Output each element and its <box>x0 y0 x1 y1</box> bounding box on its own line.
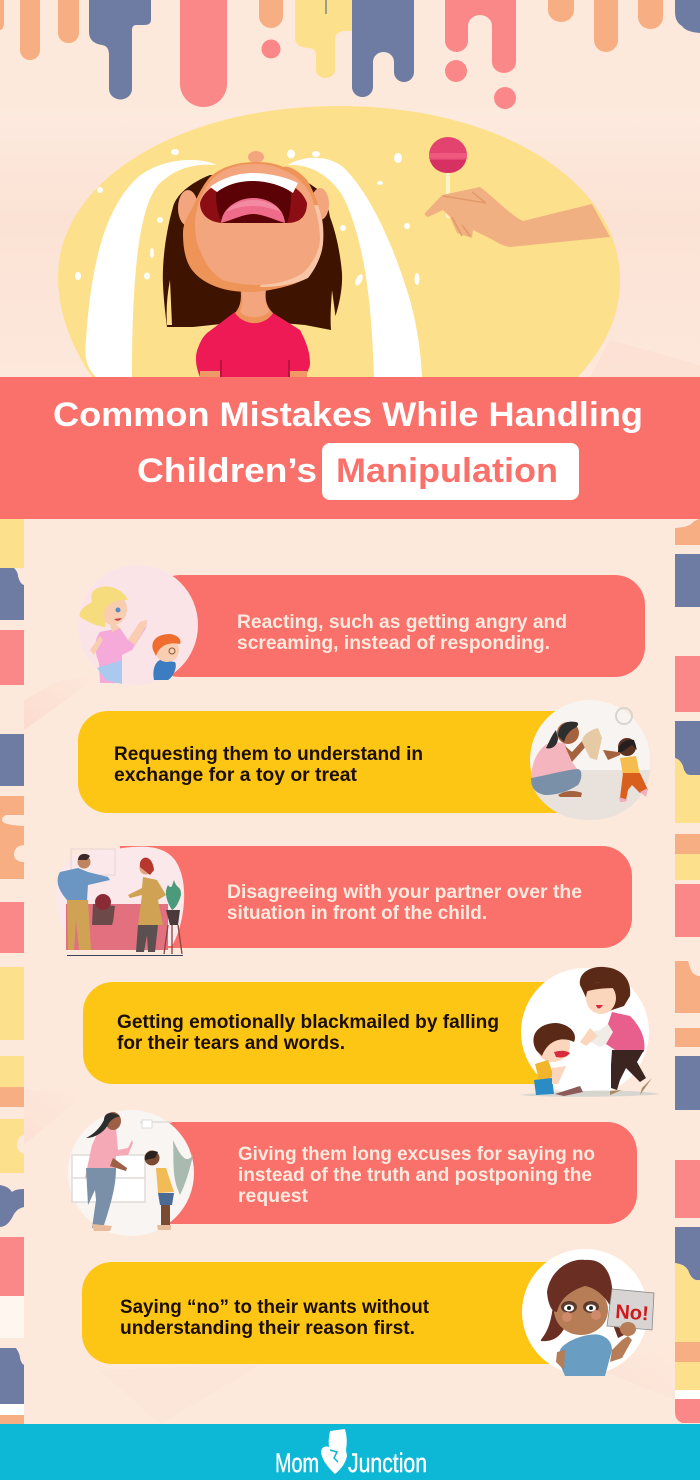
item 6: saying no <box>82 1249 654 1376</box>
bar <box>120 846 632 948</box>
text <box>227 882 582 924</box>
text: exchange for a toy or treat <box>114 765 358 786</box>
text: Giving them long excuses for saying no <box>238 1144 595 1165</box>
text <box>120 1297 430 1339</box>
title line 1: Common Mistakes While Handling <box>53 396 643 434</box>
text <box>238 1144 595 1207</box>
text: instead of the truth and postponing the <box>238 1165 592 1186</box>
logo: Junction <box>348 1448 427 1478</box>
lollipop <box>446 173 450 218</box>
icon: mother and baby <box>321 1429 347 1474</box>
item 1: reacting <box>78 565 645 685</box>
text: Disagreeing with your partner over the <box>227 882 582 903</box>
yellow backdrop <box>58 106 620 377</box>
tuft <box>248 151 264 163</box>
text: Getting emotionally blackmailed by falling <box>117 1012 499 1033</box>
illustration: mother scolding child <box>68 1110 194 1236</box>
illustration: crying child and worried mother <box>520 967 660 1097</box>
highlight box <box>322 443 579 500</box>
illustration: girl holding No sign <box>522 1249 654 1376</box>
bar <box>78 711 570 813</box>
text <box>114 744 423 786</box>
hand <box>425 187 610 247</box>
text: situation in front of the child. <box>227 903 487 924</box>
bar <box>82 1262 560 1364</box>
text: Saying “no” to their wants without <box>120 1297 430 1318</box>
logo <box>275 1429 427 1478</box>
item 2: requesting <box>78 700 650 820</box>
text: Reacting, such as getting angry and <box>237 612 567 633</box>
shirt <box>196 312 310 377</box>
text: for their tears and words. <box>117 1033 345 1054</box>
hair <box>163 175 342 330</box>
item 5: long excuses <box>68 1110 637 1236</box>
left side strip <box>0 519 24 1424</box>
text: Requesting them to understand in <box>114 744 423 765</box>
title banner <box>0 377 700 519</box>
top paint drips <box>0 0 700 109</box>
head <box>183 162 323 292</box>
item 3: disagreeing <box>56 846 632 956</box>
bar <box>83 982 560 1084</box>
text <box>117 1012 499 1054</box>
text: screaming, instead of responding. <box>237 633 550 654</box>
item 4: emotionally blackmailed <box>83 967 660 1097</box>
title line 2: Children’s <box>137 452 317 490</box>
right side strip <box>675 519 700 1423</box>
illustration: mother offering toy <box>530 700 650 820</box>
illustration: parents arguing <box>56 847 184 956</box>
logo: Mom <box>275 1448 319 1478</box>
footer <box>0 1424 700 1480</box>
mouth <box>200 176 307 223</box>
text: understanding their reason first. <box>120 1318 415 1339</box>
illustration: angry mother and child <box>78 565 198 685</box>
ears <box>178 190 198 226</box>
tears <box>75 149 422 377</box>
sign: No! <box>615 1301 649 1325</box>
bar <box>150 575 645 677</box>
neck <box>235 285 273 323</box>
highlight box: Manipulation <box>336 452 558 490</box>
bar <box>150 1122 637 1224</box>
text: request <box>238 1186 309 1207</box>
text <box>237 612 567 654</box>
hero illustration: crying child with lollipop <box>58 106 620 377</box>
